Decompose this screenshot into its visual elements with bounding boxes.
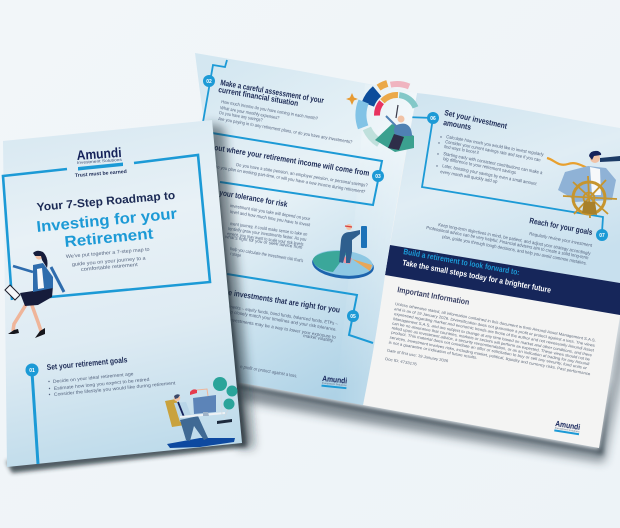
heading step 04: your tolerance for risk: [219, 188, 289, 209]
reach for your goals text: Reach for your goals: [529, 216, 594, 237]
text step 05: to closely match your timelines and your risk tolerance.: [229, 309, 337, 332]
important information: expressed regarding market and economic trends are those of the author and not necessarily Amundi Asset: [394, 311, 595, 353]
text step 03: Do you have a state pension, an employer pension, or personal savings?: [236, 162, 368, 188]
badge 05: [347, 310, 359, 322]
bullets step 01: Decide on your ideal retirement age: [53, 371, 134, 384]
step 06 bullets: Calculate how much you would like to invest regularly: [446, 134, 545, 157]
logo: amundi on inner page: Investment Solutions: [322, 382, 348, 387]
bullets step 01: [48, 371, 176, 397]
important information: relied upon as investment advice, a security recommendation, or as an indication of trading for any Amundi: [391, 325, 590, 366]
logo: amundi on cover: Trust must be earned: [75, 169, 127, 179]
text step 03: Do you plan on working part-time, or will you have a new income during retirement?: [214, 164, 366, 194]
heading step 02: current financial situation: [218, 85, 299, 108]
illustration: man with telescope at ship wheel: [547, 151, 620, 218]
step 06 bullets: Starting early with consistent contributions can make a: [443, 151, 543, 175]
text step 04: what's right for you or seek advice from: [225, 234, 303, 250]
important information: Date of first use: 19 January 2026: [387, 348, 449, 363]
cover shadow: [6, 124, 247, 473]
badge 01 with timeline: 01: [29, 368, 35, 374]
text step 05: [229, 304, 339, 379]
text step 04: r stage: [230, 251, 242, 258]
spine glare: [335, 84, 417, 405]
bullets step 01: Estimate how long you expect to be retired: [54, 377, 150, 391]
bullets step 01: Consider the lifestyle you would like during retirement: [54, 380, 176, 397]
illustration: man on pie chart: [311, 224, 375, 282]
text step 04: ement, you may want to scale your risk levels: [227, 231, 304, 247]
cover subtitle: [66, 247, 150, 273]
illustration: dial with seated man: [346, 69, 443, 161]
connector frame step 05: [227, 274, 373, 343]
cover subtitle: guide you on your journey to a: [72, 256, 146, 268]
cover title: [36, 190, 178, 251]
bullets step 02: What are your monthly expenses?: [220, 105, 280, 120]
heading step 05: e investments that are right for you: [228, 288, 341, 315]
heading step 01: Set your retirement goals: [46, 355, 128, 372]
badge 06: [427, 112, 439, 124]
badge 01 with timeline: [26, 364, 38, 464]
panel: right page: [363, 93, 620, 448]
panel: left page: [195, 53, 443, 405]
heading: set your investment amounts: amounts: [443, 118, 472, 132]
cover title: Your 7-Step Roadmap to: [36, 190, 176, 214]
badge 05: 05: [350, 314, 356, 320]
cover title: Investing for your: [36, 206, 178, 236]
important information: Doc ID: 4733176: [385, 356, 417, 367]
step 06 connector line: [405, 117, 603, 232]
important information: services. Investment involves risks, including market, political, liquidity and currency risks. Past performance: [389, 335, 591, 376]
cover subtitle: We've put together a 7-step map to: [66, 247, 150, 260]
text step 04: level and how much time you have to invest: [230, 209, 311, 227]
bullets step 02: [218, 99, 353, 145]
text step 04: help you calculate the investment risk that's: [230, 246, 304, 263]
cover subtitle: comfortable retirement: [81, 262, 139, 273]
logo: amundi on cover: [75, 145, 127, 179]
heading step 02: Make a careful assessment of your: [220, 78, 325, 105]
logo: amundi on inner page: Amundi: [322, 374, 348, 386]
text step 05: ments – equity funds, bond funds, balanced funds, ETFs –: [229, 304, 339, 326]
bullets step 02: Are you paying in to any retirement plans, or do you have any investments?: [218, 116, 353, 145]
illustration: man at desk with plants: [165, 377, 238, 448]
badge 03: 03: [375, 174, 381, 180]
step 06 bullets: Consider your current savings rate and see if you can: [445, 139, 541, 163]
badge 07: [596, 229, 608, 241]
heading step 03: out where your retirement income will come from: [214, 143, 370, 178]
connector line step 02: [203, 60, 227, 122]
step 06 bullets: every month will quickly add up: [440, 169, 498, 184]
important information: can be no assurance that countries, markets or sectors will perform as expected. These views should not be: [392, 321, 590, 362]
step 06 bullets: [436, 134, 545, 186]
logo: amundi on back page: Investment Solutions: [554, 427, 580, 434]
heading: set your investment amounts: Set your investment: [444, 108, 508, 131]
badge 07: 07: [599, 233, 605, 239]
connector frame step 03: [212, 133, 382, 205]
panel: front cover: [3, 120, 242, 467]
reach for your goals text: Keep long-term objectives in mind, be patient, and adjust your strategy accordingly: [438, 222, 592, 256]
badge 02: [203, 75, 215, 87]
important information: Management S.A.S. and are subject to change at any time based on market and other conditions, and there: [393, 316, 592, 357]
text step 04: [225, 203, 311, 263]
text step 04: ment journey, it could make sense to take on: [230, 221, 308, 237]
important information: Unless otherwise stated, all information contained in this document is from Amundi Asset Management S.A.S.: [395, 301, 596, 343]
cover title: Retirement: [64, 226, 154, 251]
important information: is not a guarantee or indication of future results.: [388, 340, 478, 360]
navy banner: Build a retirement to look forward to:: [403, 247, 520, 277]
bullets step 02: How much income do you have coming in each month?: [221, 99, 319, 121]
step 06 bullets: find ways to boost it: [444, 144, 480, 155]
text step 05: investments may be a way to lower your exposure to: [229, 317, 337, 340]
illustration: woman sitting with laptop: [5, 251, 64, 338]
logo: amundi on cover: Investment Solutions: [77, 157, 122, 165]
badge 02: 02: [206, 79, 212, 85]
text step 05: n profit or protect against a loss.: [240, 364, 298, 379]
important information: and is as of 19 January 2026. Diversification does not guarantee a profit or protect against a loss. The views: [394, 306, 595, 348]
step 06 bullets: big difference to your retirement savings: [443, 156, 517, 175]
badge 03: [372, 170, 384, 182]
bullets step 02: Do you have any savings?: [219, 110, 263, 123]
reach for your goals text: plan, guide you through tough decisions, and help you avoid common mistakes.: [442, 234, 587, 266]
important information: product. This material does not constitute an offer or solicitation to buy or sell any security, fund units or: [391, 330, 588, 371]
important information: Important Information: [397, 285, 470, 307]
text step 04: tentially grow your investments faster. As you: [228, 226, 307, 242]
text step 04: investment risk you take will depend on your: [230, 203, 311, 221]
important information: [385, 285, 596, 376]
logo: amundi on cover: Amundi: [76, 145, 122, 163]
navy banner: Take the small steps today for a brighter future: [402, 258, 552, 295]
spread drop shadow: [237, 300, 620, 462]
reach for your goals text: Professional advice can be very helpful. Financial advisers aim to create a solid long-term: [426, 225, 589, 260]
step 06 bullets: Later, boosting your savings by even a small amount: [442, 163, 538, 186]
badge 06: 06: [430, 116, 436, 122]
logo: amundi on back page: Amundi: [555, 419, 581, 432]
cover frame: [3, 155, 210, 300]
text step 05: market volatility.: [303, 333, 334, 343]
reach for your goals text: Regularly review your investment: [529, 231, 593, 248]
navy banner: [385, 245, 620, 315]
star: [346, 93, 358, 105]
